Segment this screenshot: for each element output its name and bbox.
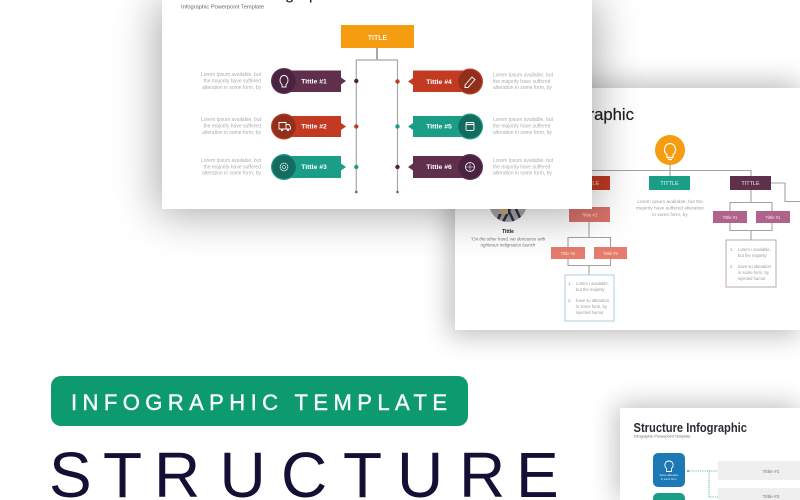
text: teal description: in some form, by [652, 212, 688, 218]
tag: Tittle #1 [271, 68, 346, 94]
shadow: second slide [449, 82, 800, 336]
list box: blue outline: 2. [568, 298, 572, 303]
list box: mauve outline: Lorem i available, [738, 247, 771, 252]
main slide subtitle: Infographic Powerpoint Template [181, 4, 264, 10]
list box: mauve outline: 1. [730, 247, 734, 252]
box: red title [592, 176, 610, 190]
blue card with bulb icon [653, 453, 685, 487]
list box: blue outline: in some form, by [576, 304, 608, 309]
blue card with bulb icon: Some alteration [660, 473, 679, 477]
description: right column: the majority have suffered [493, 124, 551, 130]
tag: Tittle #6: Tittle #6 [426, 164, 452, 171]
left nodes [354, 79, 358, 193]
box: left Title #2: Tittle #2 [561, 251, 576, 256]
description: right column: the majority have suffered [493, 79, 551, 85]
description: left column: alteration in some form, by [202, 130, 261, 136]
box: right Title #2 [594, 247, 627, 259]
panel: main slide, six-title hierarchy [162, 0, 592, 209]
description: left column: Lorem Ipsum available, but [201, 72, 262, 78]
list box: blue outline: but the majority [576, 287, 606, 292]
teal card [653, 493, 685, 500]
description: right column: the majority have suffered [493, 164, 551, 170]
box: right Title #2: Tittle #2 [603, 251, 619, 256]
description: right column: Lorem Ipsum available, but [493, 72, 554, 78]
description: left column: alteration in some form, by [202, 170, 261, 176]
box: mauve Title #1 left [713, 211, 747, 223]
list box: mauve outline: have su alteration [738, 264, 772, 269]
row: Tittle #1: Tittle #1 [763, 469, 780, 475]
list box: mauve outline [726, 240, 776, 287]
description: right column: Lorem Ipsum available, but [493, 158, 554, 164]
tag: Tittle #4 [408, 68, 483, 94]
icon: orange bulb circle [655, 135, 685, 165]
box: left Title #2 [551, 247, 585, 259]
description: left column: the majority have suffered [204, 124, 261, 130]
list box: blue outline: Lorem i available, [576, 281, 609, 286]
description: right column: alteration in some form, by [493, 170, 552, 176]
tag: Tittle #3: Tittle #3 [301, 164, 327, 171]
list box: blue outline: have su alteration [576, 298, 610, 303]
tag: Tittle #6 [408, 154, 483, 180]
avatar quote [471, 236, 546, 248]
tag: Tittle #2 [271, 114, 346, 140]
badge: Infographic Template [51, 376, 468, 426]
third slide title: Structure Infographic [634, 420, 747, 435]
panel: second slide, organisation chart [455, 88, 800, 330]
tag: Tittle #3 [271, 154, 346, 180]
tag: Tittle #2: Tittle #2 [301, 124, 327, 130]
box: red title: TITTLE [581, 181, 599, 187]
avatar quote: righteous indignation launch [481, 242, 536, 248]
box: TITLE: TITLE [368, 35, 388, 42]
box: Title #1 salmon [569, 207, 610, 222]
blue card with bulb icon: in some form, [661, 477, 677, 481]
row: Tittle #2: Tittle #2 [763, 494, 780, 500]
tag: Tittle #5: Tittle #5 [426, 124, 452, 130]
dotted connector lines [687, 470, 718, 497]
description: right column: alteration in some form, by [493, 130, 552, 136]
row: Tittle #2 [718, 488, 800, 500]
text: teal description: majority have suffered alteration [636, 206, 704, 212]
description: left column: Lorem Ipsum available, but [201, 158, 262, 164]
description: left column: Lorem Ipsum available, but [201, 117, 262, 123]
box: teal title [649, 176, 690, 190]
list box: mauve outline: in some form, by [738, 270, 770, 275]
box: mauve Title #1 left: Tittle #1 [723, 215, 738, 220]
list box: mauve outline: but the majority [738, 253, 768, 258]
right nodes [395, 79, 400, 193]
shadow: main slide [158, 0, 596, 214]
description: right column: alteration in some form, by [493, 85, 552, 91]
box: Title #1 salmon: Tittle #1 [582, 212, 598, 218]
box: teal title: TITTLE [660, 181, 679, 187]
box: mauve Title #1 right [756, 211, 790, 223]
list box: blue outline: injected humor [576, 310, 604, 315]
row: Tittle #1 [718, 461, 800, 480]
description: left column: alteration in some form, by [202, 85, 261, 91]
list box: blue outline: 1. [568, 281, 572, 286]
box: purple title [730, 176, 771, 190]
panel: third slide, Structure Infographic [616, 404, 800, 500]
description: left column [201, 72, 262, 176]
tag: Tittle #1: Tittle #1 [301, 78, 327, 86]
box: purple title: TITTLE [741, 181, 760, 187]
description: left column: the majority have suffered [204, 164, 261, 170]
second slide title: Structure Infographic [479, 106, 634, 124]
description: left column: the majority have suffered [204, 79, 261, 85]
third slide subtitle: Infographic Powerpoint Template [634, 434, 691, 438]
tag: Tittle #5 [408, 114, 483, 140]
list box: mauve outline: 2. [730, 264, 734, 269]
avatar photo [490, 209, 526, 222]
list box: blue outline [565, 275, 614, 321]
text: teal description [636, 199, 704, 218]
box: TITLE [341, 25, 414, 48]
box: mauve Title #1 right: Tittle #1 [766, 215, 781, 220]
avatar quote: "On the other hand, we denounce with [471, 236, 546, 242]
tag: Tittle #4: Tittle #4 [426, 79, 452, 86]
avatar name: Tittle [502, 229, 514, 235]
list box: mauve outline: injected humor [738, 276, 766, 281]
description: right column: Lorem Ipsum available, but [493, 117, 554, 123]
connector lines [568, 165, 800, 275]
badge: Infographic Template: INFOGRAPHIC TEMPLATE [71, 390, 447, 415]
tree connector lines [356, 48, 398, 192]
description: right column [493, 72, 554, 176]
text: teal description: Lorem Ipsum available, but the [637, 199, 703, 205]
